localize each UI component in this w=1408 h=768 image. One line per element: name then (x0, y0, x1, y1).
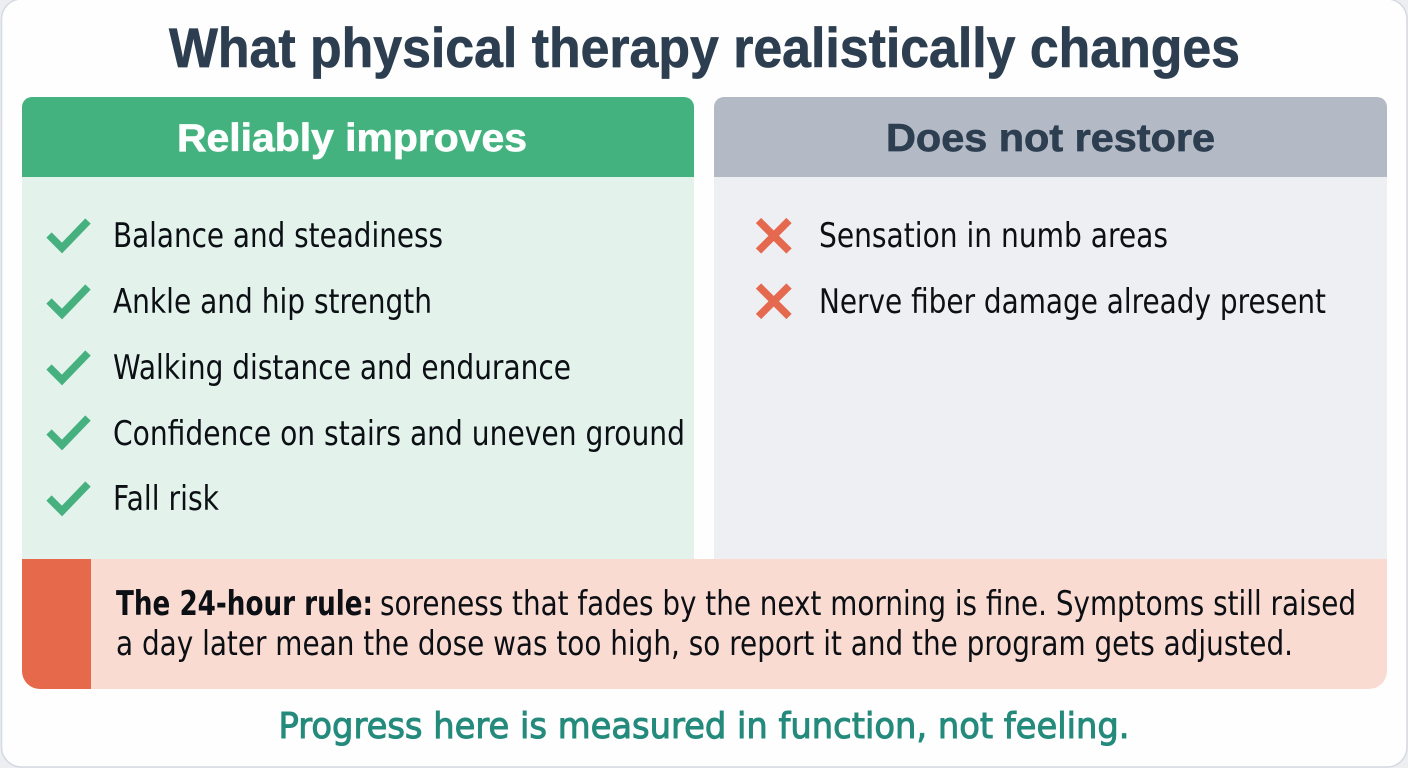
callout text: The 24-hour rule: (116, 584, 373, 624)
item: fall risk: Fall risk (113, 479, 219, 519)
item: confidence: Confidence on stairs and uneven ground (113, 414, 685, 454)
heading: reliably improves: Reliably improves (177, 117, 527, 160)
item: strength: Ankle and hip strength (113, 282, 432, 322)
panel: reliably improves (22, 97, 694, 559)
item: walking: Walking distance and endurance (113, 348, 571, 388)
item: balance: Balance and steadiness (113, 216, 443, 256)
title: What physical therapy realistically changes (169, 16, 1240, 79)
callout accent bar (22, 559, 91, 689)
item: fall risk (49, 479, 219, 519)
callout text (116, 584, 1356, 664)
panel: does not restore (714, 97, 1387, 559)
item: sensation: Sensation in numb areas (819, 216, 1168, 256)
callout: 24-hour rule (22, 559, 1387, 689)
heading: does not restore: Does not restore (886, 117, 1215, 160)
closing line: Progress here is measured in function, not feeling. (278, 706, 1130, 747)
